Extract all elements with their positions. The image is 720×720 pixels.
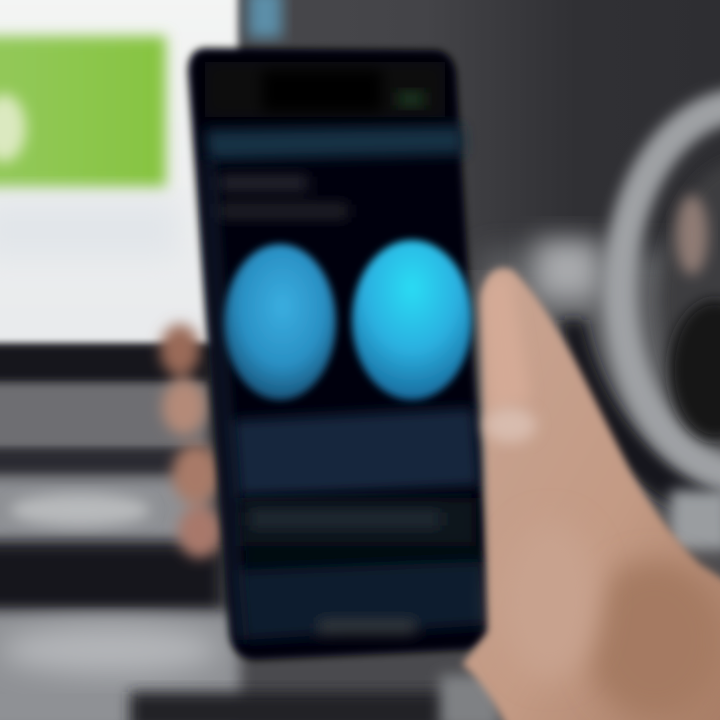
background: white screen with green banner [0,0,238,345]
icon: left blue lens circle [224,244,336,400]
hand: thumb and palm on the right [462,268,720,720]
phone left edge highlight [208,160,240,640]
background: keyboard-like stripes at left [0,345,500,720]
hand: fingers behind phone on the left [160,324,222,558]
phone title text blur [218,176,348,218]
icon: right blue lens circle [352,240,472,400]
phone header bar [205,126,464,160]
lower screen text blur [238,498,488,640]
phone top status area [205,62,445,117]
phone [188,48,490,660]
phone body [188,48,490,660]
background: steering wheel [535,105,720,550]
background: blue object at top edge [248,0,282,38]
lower screen panel [232,408,480,498]
